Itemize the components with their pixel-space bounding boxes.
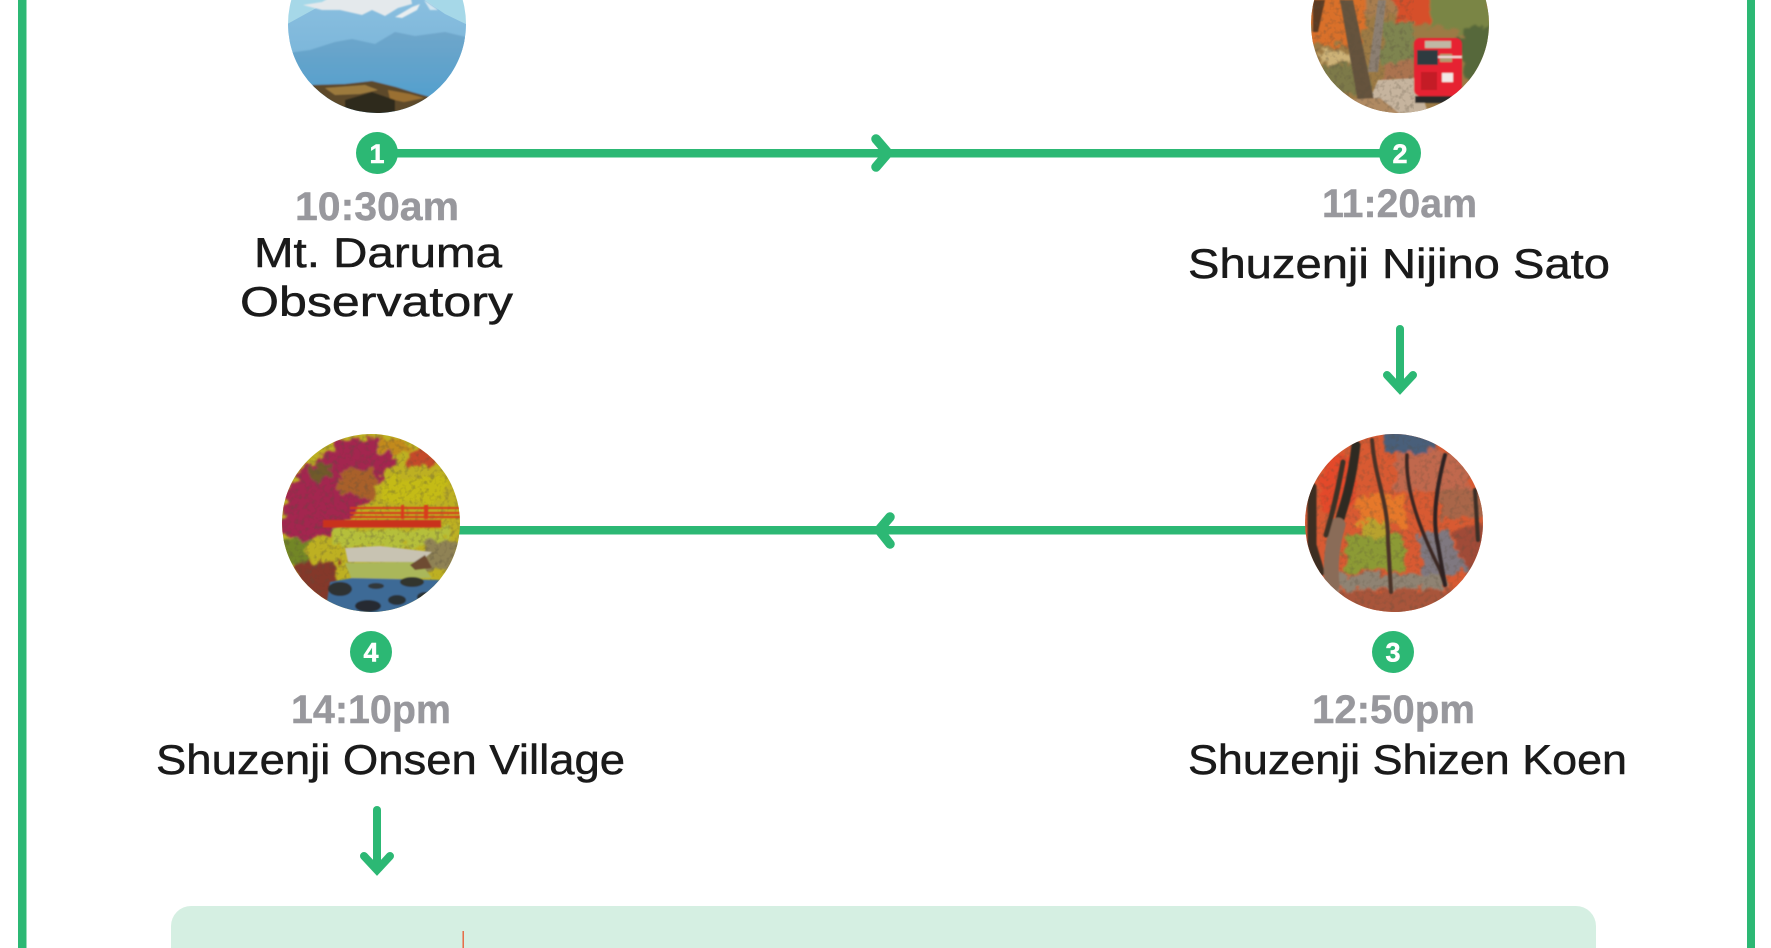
panel: bottom mint card: [171, 906, 1596, 948]
route line from stop 3 to stop 4: [455, 517, 1310, 544]
frame: left green border: [18, 0, 26, 948]
stop 3 marker: 3: [1385, 638, 1401, 668]
name: stop 1: [240, 229, 513, 325]
stop 2 marker: 2: [1392, 139, 1408, 169]
time: stop 3: 12:50pm: [1312, 688, 1475, 732]
stop 4 marker: [350, 631, 392, 673]
arrow: stop 4 down to bottom panel: [364, 810, 390, 870]
stop 1 marker: 1: [369, 139, 385, 169]
stop 4 marker: 4: [363, 638, 379, 668]
arrow: stop 2 down to stop 3: [1387, 329, 1413, 389]
arrow: direction right: [876, 139, 888, 167]
time: stop 1: 10:30am: [295, 185, 459, 229]
route line from stop 1 to stop 2: [377, 139, 1400, 167]
stop 2 marker: [1379, 132, 1421, 174]
time: stop 4: 14:10pm: [291, 688, 451, 732]
arrow: direction left: [879, 517, 890, 544]
time: stop 2: 11:20am: [1322, 182, 1477, 226]
photo: Shuzenji Shizen Koen red maples: [1305, 434, 1483, 612]
photo: Shuzenji Onsen Village red bridge over river: [278, 432, 462, 614]
frame: right green border: [1747, 0, 1755, 948]
name: stop 1: Observatory: [240, 278, 513, 325]
name: stop 3: Shuzenji Shizen Koen: [1188, 736, 1627, 783]
name: stop 4: Shuzenji Onsen Village: [156, 736, 625, 783]
stop 3 marker: [1372, 631, 1414, 673]
photo: Mt. Daruma view of Fuji: [288, 0, 466, 113]
photo: Shuzenji Nijino Sato red bus in autumn forest: [1310, 0, 1492, 118]
marker: thin orange line: [462, 931, 464, 948]
name: stop 1: Mt. Daruma: [254, 229, 503, 276]
name: stop 2: Shuzenji Nijino Sato: [1188, 240, 1610, 287]
stop 1 marker: [356, 132, 398, 174]
